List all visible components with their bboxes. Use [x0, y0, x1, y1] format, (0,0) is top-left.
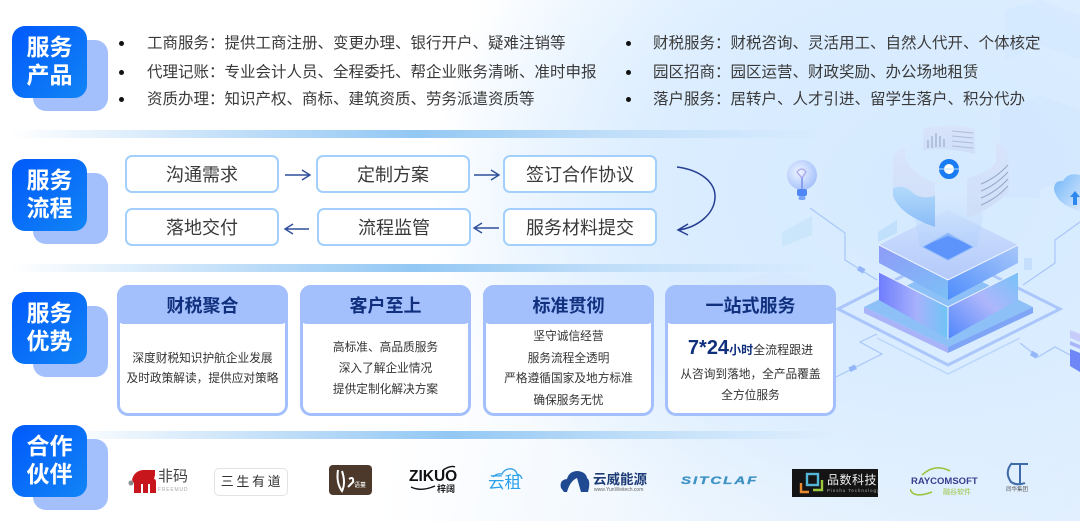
panel: 标准贯彻: 服务流程全透明: [528, 352, 609, 365]
panel: 一站式服务: [665, 285, 836, 416]
panel: 一站式服务: 7*24小时全流程跟进: [688, 337, 813, 359]
icon: small stacked block: [1070, 330, 1080, 372]
base plate: [864, 265, 1033, 353]
faint background columns: [725, 0, 1080, 300]
panel: 客户至上: 客户至上: [350, 296, 422, 316]
step 2: [316, 155, 470, 193]
panel: 一站式服务: 全方位服务: [721, 389, 780, 402]
logo: 非码: FREEMUD: [158, 487, 188, 493]
floating right panel: [967, 142, 1009, 218]
panel: 一站式服务: 一站式服务: [706, 296, 796, 316]
logo: 非码: [128, 468, 188, 493]
section badge: 服务优势: [12, 292, 108, 377]
panel: 标准贯彻: [483, 285, 654, 416]
panel: 客户至上: 深入了解企业情况: [339, 362, 432, 375]
section badge: 合作伙伴: 合作: [26, 433, 72, 459]
faint ghost panels: [782, 216, 1032, 270]
logo: ZIKUO 梓阔: [409, 466, 457, 494]
light beam: [915, 190, 983, 247]
right list: [626, 34, 1041, 108]
logo: 同华集团: [1006, 462, 1028, 493]
logo: 语蔓: [329, 465, 372, 495]
panel: product list: [119, 34, 1041, 108]
logo: 品数科技: [792, 469, 878, 497]
right list: 财税服务：财税咨询、灵活用工、自然人代开、个体核定: [653, 35, 1041, 52]
logo: RAYCOMSOFT: 融谷软件: [943, 489, 971, 496]
floating back panel: [923, 126, 975, 154]
floating left panel: [893, 148, 935, 227]
logo: 非码: 非码: [158, 468, 188, 485]
section badge: 服务流程: 服务: [26, 167, 72, 193]
partner logos: [128, 462, 1028, 497]
logo: 云威能源: [560, 471, 647, 493]
divider bars: [40, 130, 1018, 486]
panel: 标准贯彻: 严格遵循国家及地方标准: [504, 372, 633, 385]
step 2: 定制方案: [357, 165, 429, 185]
logo: RAYCOMSOFT: [910, 467, 978, 496]
logo: 云租: 云租: [488, 474, 521, 492]
logo: 三生有道: [214, 468, 288, 496]
section badge: 服务流程: 流程: [26, 195, 72, 221]
step 5: 流程监管: [358, 218, 430, 238]
panel: 财税聚合: 深度财税知识护航企业发展: [132, 352, 273, 365]
lower block: [879, 272, 1018, 339]
process flow: [125, 155, 716, 246]
panel: 财税聚合: 及时政策解读，提供应对策略: [127, 372, 278, 385]
icon: light bulb: [787, 160, 817, 200]
logo: 云威能源: 云威能源: [593, 472, 647, 487]
step 5: [317, 208, 471, 246]
panel: 财税聚合: 财税聚合: [166, 296, 238, 316]
section badge: 服务流程: [12, 159, 108, 244]
logo: 三生有道: 三生有道: [221, 474, 283, 489]
logo: 品数科技: 品数科技: [827, 473, 877, 487]
icon: cloud: [1054, 174, 1080, 212]
panel: 一站式服务: 从咨询到落地，全产品覆盖: [680, 368, 821, 381]
right list: 落户服务：居转户、人才引进、留学生落户、积分代办: [653, 91, 1025, 108]
logo: ZIKUO 梓阔: 梓阔: [437, 484, 455, 494]
section badge: 合作伙伴: [12, 425, 108, 510]
left list: 工商服务：提供工商注册、变更办理、银行开户、疑难注销等: [147, 35, 566, 52]
upper block: [879, 210, 1018, 300]
logo: 语蔓: 语蔓: [354, 483, 366, 489]
logo: 同华集团: 同华集团: [1006, 487, 1028, 493]
section badge: 服务产品: 产品: [26, 62, 72, 88]
process arrows: [284, 166, 716, 236]
circuit lines: [810, 208, 1080, 377]
logo: 云威能源: www.YunWeitech.com: [594, 487, 643, 493]
section badge: 合作伙伴: 伙伴: [26, 461, 72, 487]
panel: 标准贯彻: 坚守诚信经营: [533, 330, 604, 343]
section badge: 服务优势: 优势: [26, 328, 72, 354]
step 3: [503, 155, 657, 193]
section badge: 服务优势: 服务: [26, 300, 72, 326]
logo: 品数科技: Pinshu Technology: [827, 488, 880, 493]
right list: 园区招商：园区运营、财政奖励、办公场地租赁: [653, 64, 979, 81]
left list: 资质办理：知识产权、商标、建筑资质、劳务派遣资质等: [147, 91, 535, 108]
step 6: [125, 208, 279, 246]
step 1: 沟通需求: [166, 165, 238, 185]
left list: 代理记账：专业会计人员、全程委托、帮企业账务清晰、准时申报: [147, 64, 597, 81]
panel: 财税聚合: [117, 285, 288, 416]
panel: 客户至上: [300, 285, 471, 416]
panel: 客户至上: 提供定制化解决方案: [333, 383, 438, 396]
icon: ring logo: [939, 162, 959, 176]
step 6: 落地交付: [166, 218, 238, 238]
step 4: 服务材料提交: [526, 218, 634, 238]
step 3: 签订合作协议: [526, 165, 634, 185]
glowing pad: [923, 233, 973, 260]
logo: ZIKUO 梓阔: ZIKUO: [409, 468, 457, 485]
section badge: 服务产品: 服务: [26, 34, 72, 60]
panel: 标准贯彻: 标准贯彻: [532, 296, 604, 316]
step 4: [503, 208, 657, 246]
logo: SITCLAF: SITCLAF: [681, 475, 758, 487]
section badge: 服务产品: [12, 26, 108, 111]
step 1: [125, 155, 279, 193]
panel: 标准贯彻: 确保服务无忧: [533, 394, 604, 407]
left list: [119, 34, 597, 108]
logo: RAYCOMSOFT: RAYCOMSOFT: [911, 476, 978, 487]
panel: 客户至上: 高标准、高品质服务: [333, 341, 438, 354]
outer frames: [838, 253, 1060, 374]
